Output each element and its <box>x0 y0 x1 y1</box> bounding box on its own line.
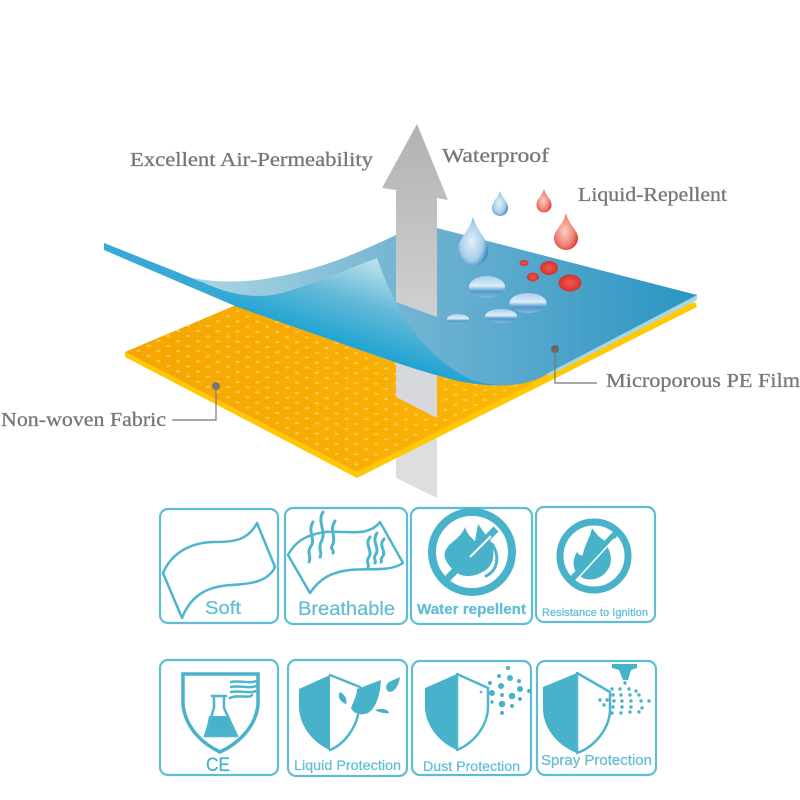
icon: liquid protection: Liquid Protection <box>294 757 401 773</box>
icon: soft <box>160 509 278 623</box>
icon: resistance to ignition: Resistance to Ignition <box>542 607 648 619</box>
arrow tail below fabric <box>396 400 437 498</box>
icon: water repellent <box>411 508 532 624</box>
water drops falling <box>458 191 508 266</box>
callout: microporous PE film <box>551 345 800 392</box>
callout: microporous PE film: Microporous PE Film <box>606 370 800 392</box>
arrow middle segment through layers <box>396 350 437 418</box>
icon: water repellent: Water repellent <box>417 601 526 618</box>
label: waterproof: Waterproof <box>442 145 549 167</box>
icon: breathable <box>285 508 407 624</box>
icon: resistance to ignition <box>536 507 655 622</box>
callout: non-woven fabric: Non-woven Fabric <box>1 409 166 431</box>
icon: dust protection <box>412 661 531 775</box>
icon: liquid protection <box>288 660 407 776</box>
liquid drops falling <box>536 189 578 250</box>
air-permeability arrow <box>382 124 448 317</box>
blue beads on film <box>447 276 546 324</box>
icon: soft: Soft <box>205 598 241 618</box>
icon: spray protection <box>537 661 656 775</box>
icon: CE chemical protection: CE <box>206 755 230 776</box>
microporous PE film layer <box>104 228 697 385</box>
icon: dust protection: Dust Protection <box>423 758 520 774</box>
label: air permeability: Excellent Air-Permeability <box>130 149 373 171</box>
non-woven fabric layer <box>125 302 697 478</box>
icon: CE chemical protection <box>160 660 278 776</box>
icon: spray protection: Spray Protection <box>541 752 652 769</box>
red beads on film <box>520 260 582 292</box>
icon: breathable: Breathable <box>298 599 395 620</box>
callout: non-woven fabric <box>1 382 220 431</box>
label: liquid repellent: Liquid-Repellent <box>578 184 727 206</box>
